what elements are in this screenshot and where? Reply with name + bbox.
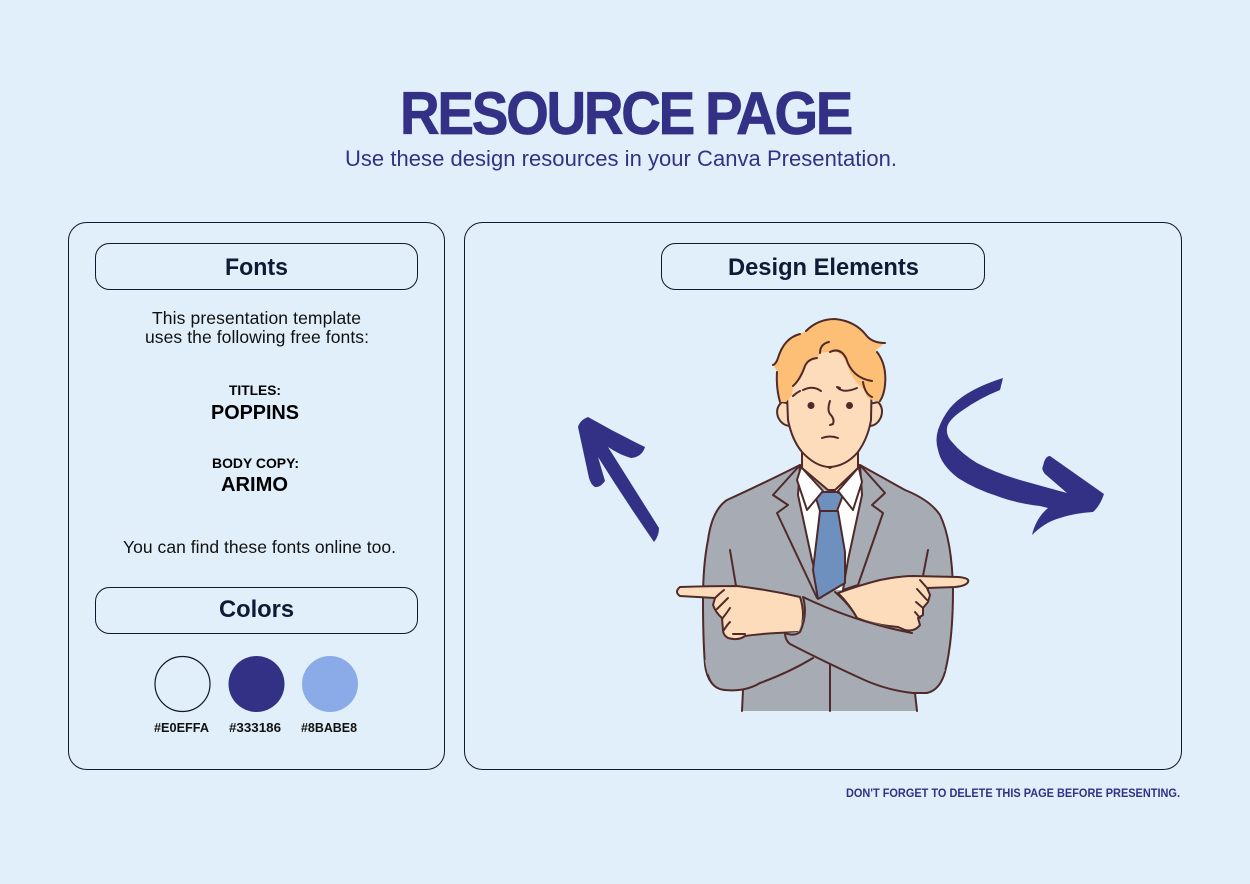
heading: colors: Colors	[219, 596, 294, 623]
text block: body copy font: ARIMO	[221, 474, 288, 496]
text block: titles font: POPPINS	[211, 402, 299, 424]
heading: design elements: Design Elements	[728, 254, 919, 281]
swatch: 8BABE8	[301, 656, 358, 735]
text block: font intro: This presentation template	[152, 308, 361, 328]
arrow: up-left brush arrow	[578, 417, 659, 542]
mouth	[822, 436, 838, 438]
heading: design elements	[662, 244, 984, 290]
panel: fonts and colors	[68, 222, 444, 770]
neck	[802, 450, 858, 490]
right lapel	[843, 465, 885, 590]
text block: body copy font	[212, 455, 299, 496]
text block: titles font: TITLES:	[229, 382, 281, 398]
shirt collar	[797, 464, 823, 510]
subtitle: Use these design resources in your Canva Presentation.	[345, 146, 897, 171]
text block: font intro: uses the following free fonts:	[145, 327, 369, 347]
left lapel	[773, 465, 822, 600]
heading: fonts: Fonts	[225, 254, 288, 281]
footer note: DON'T FORGET TO DELETE THIS PAGE BEFORE PRESENTING.	[846, 788, 1180, 800]
text block: titles font	[211, 382, 299, 424]
swatch: 333186	[228, 656, 284, 735]
ears	[777, 402, 795, 426]
text block: fonts online note: You can find these fonts online too.	[123, 537, 396, 557]
face	[786, 345, 872, 467]
panel: design elements	[464, 222, 1182, 770]
pointing hand, right side	[838, 576, 968, 630]
text block: body copy font: BODY COPY:	[212, 455, 299, 471]
swatch: 8BABE8: #8BABE8	[301, 721, 357, 735]
heading: colors	[96, 588, 418, 634]
nose	[828, 401, 834, 425]
swatch: E0EFFA	[154, 656, 210, 735]
suit lower torso	[742, 680, 917, 711]
text block: font intro	[145, 308, 369, 347]
swatch: E0EFFA: #E0EFFA	[154, 721, 209, 735]
pointing hand, left side	[677, 586, 803, 639]
center seam	[742, 665, 917, 711]
hair	[773, 319, 885, 402]
title: RESOURCE	[400, 80, 693, 147]
shirt	[798, 470, 862, 590]
illustration: businessman pointing both ways	[677, 319, 968, 711]
arrow: curved right brush arrow	[936, 378, 1104, 535]
suit jacket	[703, 465, 953, 693]
back arm sleeve	[705, 630, 830, 690]
eyes	[808, 402, 814, 409]
swatch: 333186: #333186	[229, 721, 281, 735]
title: PAGE	[705, 80, 851, 147]
eyebrows	[803, 387, 857, 391]
sleeve creases	[730, 550, 928, 586]
necktie	[813, 511, 845, 599]
heading: fonts	[96, 244, 418, 290]
front arm sleeve	[784, 592, 945, 693]
